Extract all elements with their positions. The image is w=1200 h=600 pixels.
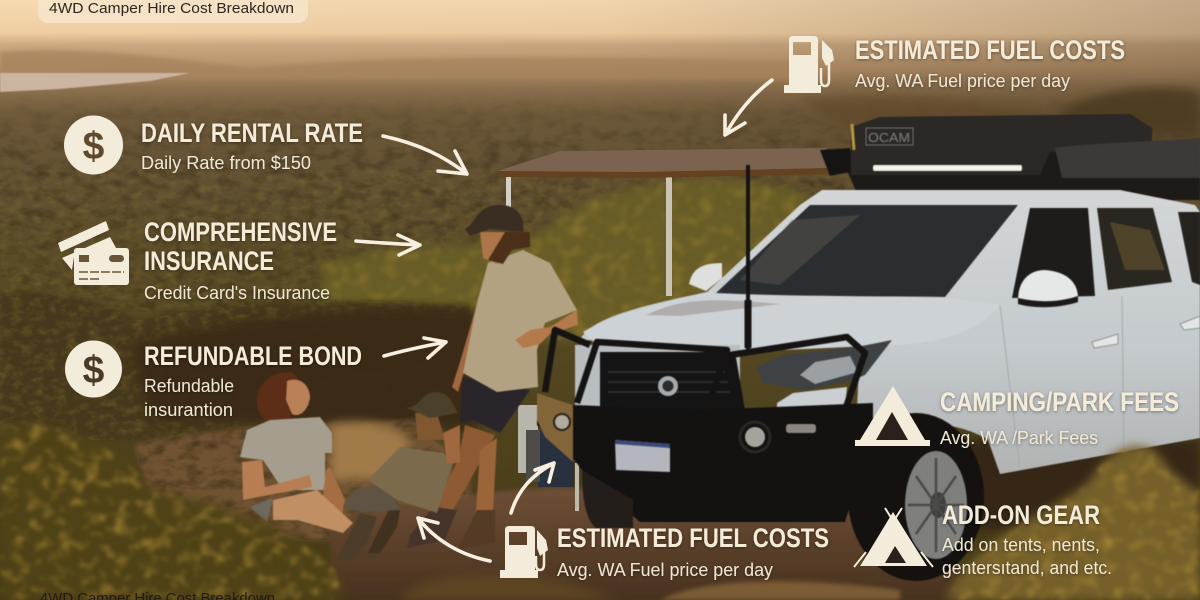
heading and detail: insurantion <box>144 400 233 420</box>
callout: add-on gear <box>854 500 1112 578</box>
arrow: daily rate <box>383 136 467 174</box>
icon: tent with guy lines <box>854 508 933 567</box>
icon: dollar coin <box>65 340 122 398</box>
roof rack <box>838 150 1200 200</box>
bull bar <box>545 330 865 410</box>
heading and detail: Add on tents, nents, <box>942 535 1100 555</box>
heading and detail <box>940 387 1179 448</box>
icon: dollar coin: $ <box>83 125 105 168</box>
shadowed bush behind the seated group <box>130 308 480 430</box>
white 4WD camper with roof-top tent <box>537 114 1200 581</box>
arrow: bottom fuel to cooler <box>511 463 554 513</box>
arrow: insurance <box>356 235 420 255</box>
heading and detail: gentersıtand, and etc. <box>942 558 1112 578</box>
icon: credit cards <box>58 221 129 285</box>
car body <box>580 190 1200 474</box>
icon: dollar coin <box>64 116 123 174</box>
heading and detail <box>942 500 1112 578</box>
heading and detail: Daily Rate from $150 <box>141 153 311 173</box>
sunlit bushes behind the camper <box>320 180 810 340</box>
heading and detail: Credit Card's Insurance <box>144 283 330 303</box>
heading and detail: DAILY RENTAL RATE <box>141 118 363 148</box>
mirrors <box>1018 270 1078 304</box>
bumper <box>537 393 873 522</box>
heading and detail: ESTIMATED FUEL COSTS <box>855 35 1125 65</box>
seated woman <box>240 372 400 560</box>
heading and detail: Avg. WA Fuel price per day <box>557 560 773 580</box>
heading and detail <box>855 35 1125 91</box>
heading and detail: REFUNDABLE BOND <box>144 341 362 371</box>
water inlet <box>0 73 190 92</box>
side windows <box>1012 208 1095 298</box>
cooler box and storage by the bumper <box>518 405 579 511</box>
heading and detail: ESTIMATED FUEL COSTS <box>557 523 829 553</box>
awning with poles <box>497 148 832 296</box>
arrow: refundable bond <box>384 338 446 358</box>
front grille <box>575 345 740 412</box>
top title label <box>38 0 308 23</box>
heading and detail: ADD-ON GEAR <box>942 500 1100 530</box>
roof-top tent box <box>820 114 1200 178</box>
heading and detail <box>141 118 363 173</box>
arrow: top fuel <box>725 80 772 135</box>
man standing, leaning on the bull bar <box>407 205 578 550</box>
callout: daily rental rate <box>64 116 363 174</box>
midground: rolling scrub landscape <box>0 88 1200 440</box>
icon: fuel pump <box>500 526 548 578</box>
heading and detail: INSURANCE <box>144 246 274 276</box>
dry grass and dirt ground <box>135 420 1200 600</box>
icon: tent <box>855 386 930 446</box>
windshield <box>716 205 1018 297</box>
heading and detail: COMPREHENSIVE <box>144 217 337 247</box>
headlight <box>757 340 892 390</box>
callout: estimated fuel costs, bottom <box>500 523 829 580</box>
antenna <box>746 165 750 350</box>
heading and detail: Refundable <box>144 376 234 396</box>
callout: estimated fuel costs, top <box>784 35 1125 93</box>
heading and detail <box>557 523 829 580</box>
roof-top tent box: OCAM <box>868 130 910 145</box>
heading and detail <box>144 341 362 420</box>
arrow: bottom fuel to group <box>418 518 490 561</box>
grille badge <box>658 376 678 396</box>
icon: dollar coin: $ <box>83 349 105 392</box>
foreground: out-of-focus left bush <box>0 423 900 600</box>
callout: camping and park fees <box>855 386 1179 448</box>
icon: fuel pump <box>784 36 834 93</box>
reclining person with brimmed hat <box>343 392 460 513</box>
heading and detail: Avg. WA /Park Fees <box>940 428 1098 448</box>
callout: refundable bond <box>65 340 362 420</box>
heading and detail <box>144 217 337 303</box>
top title label: 4WD Camper Hire Cost Breakdown <box>49 0 294 17</box>
foreground: out-of-focus right bush <box>945 446 1200 600</box>
wheels <box>582 470 633 528</box>
callout: comprehensive insurance <box>58 217 337 303</box>
door details <box>1092 334 1118 348</box>
heading and detail: Avg. WA Fuel price per day <box>855 71 1070 91</box>
